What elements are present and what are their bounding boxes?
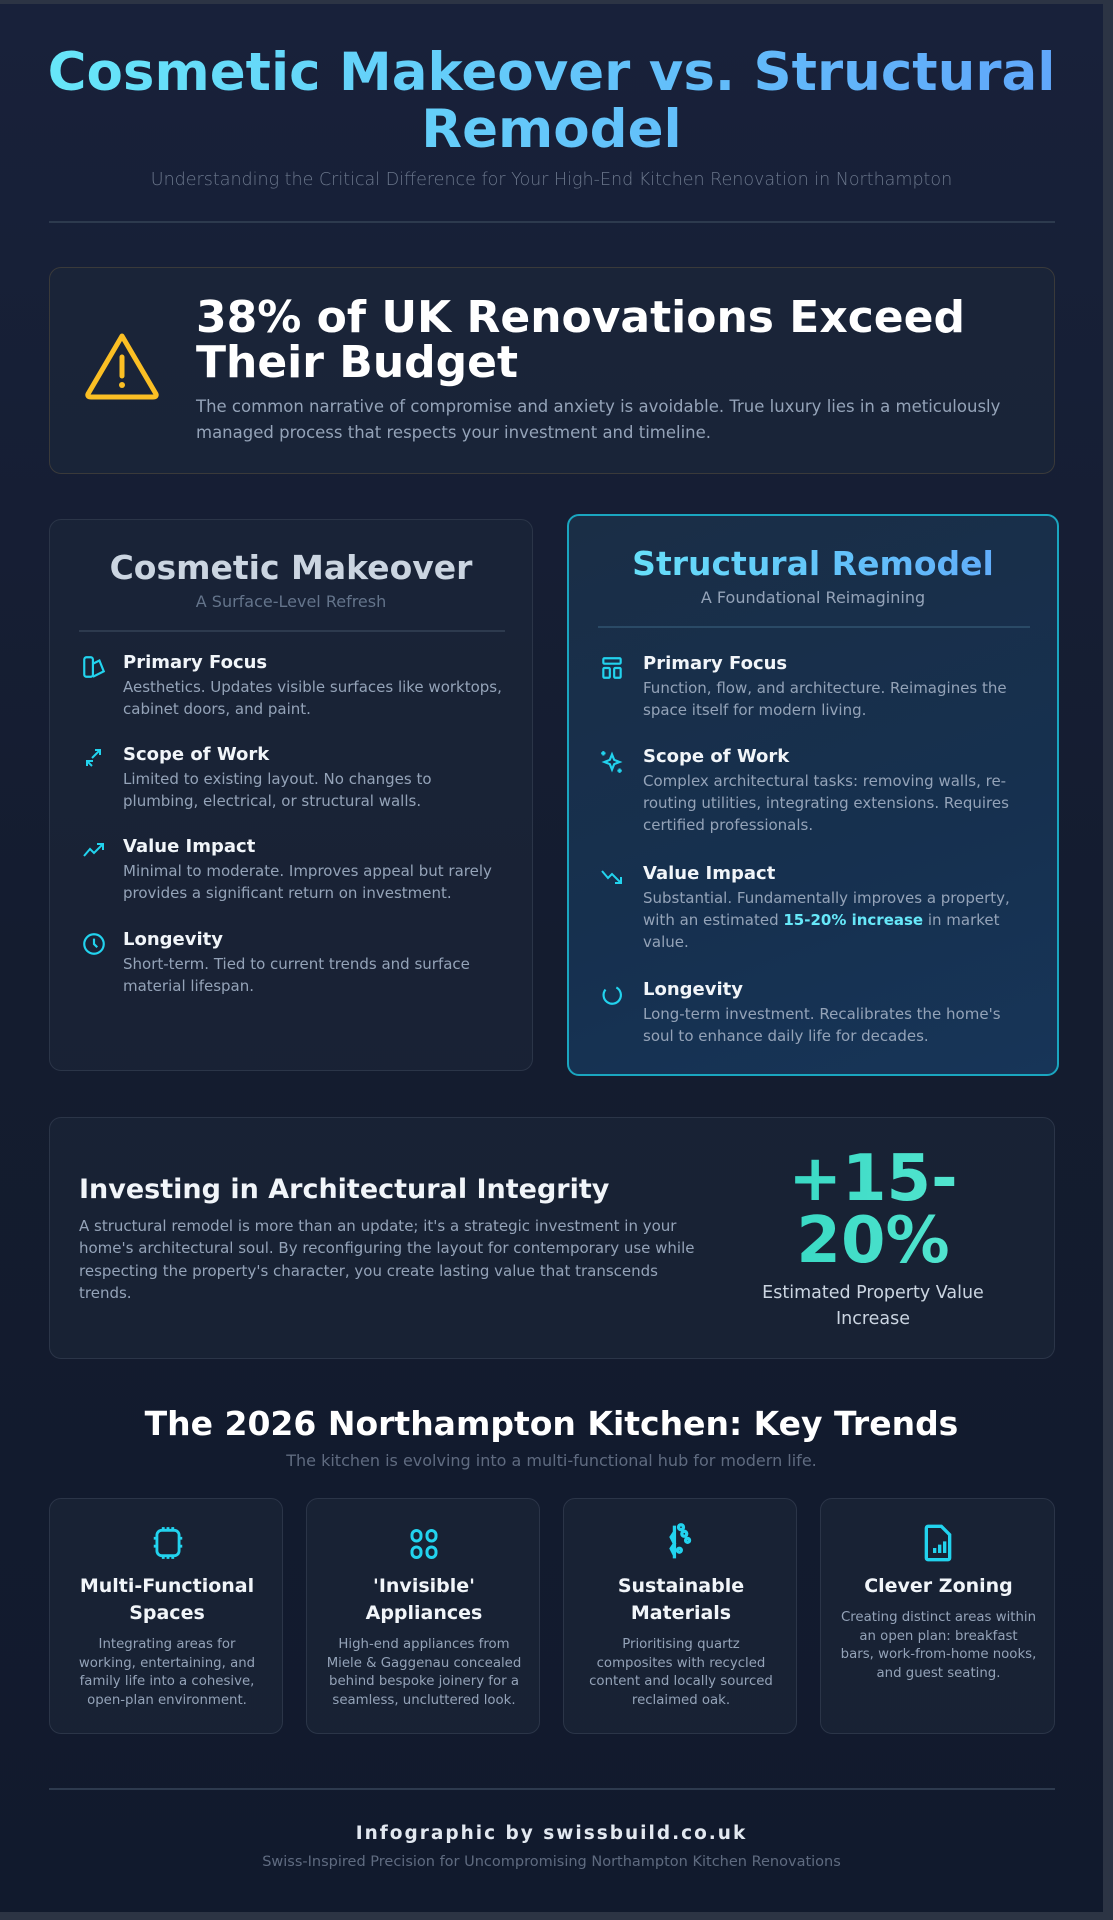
panel: cosmetic makeover: Longevity — [123, 929, 223, 950]
trend card: invisible appliances — [306, 1498, 540, 1734]
panel: structural remodel: Long-term investment. Recalibrates the home's soul to enhance daily life for decades. — [643, 1005, 1001, 1045]
trend card: clever zoning: Creating distinct areas within — [841, 1610, 1036, 1625]
alert heading — [196, 292, 965, 388]
body: trends. — [79, 1284, 132, 1302]
trend card: multi-functional: Spaces — [129, 1602, 205, 1624]
panel: structural remodel: Primary Focus — [643, 653, 787, 674]
heading: Cosmetic Makeover — [110, 548, 472, 587]
trends subtitle: The kitchen is evolving into a multi-functional hub for modern life. — [286, 1451, 817, 1470]
stat: +15-20%: Estimated Property Value — [762, 1283, 984, 1303]
trend card: sustainable: Materials — [631, 1602, 731, 1624]
trend card: sustainable: content and locally sourced — [589, 1674, 773, 1689]
stat: +15-20%: +15- — [788, 1142, 958, 1216]
stat: +15-20% — [762, 1142, 984, 1329]
trends heading: The 2026 Northampton Kitchen: Key Trends — [145, 1404, 958, 1443]
trend card: multi-functional: Integrating areas for — [99, 1637, 235, 1652]
item: value — [601, 863, 1010, 951]
title: Cosmetic Makeover vs. Structural Remodel — [48, 42, 1055, 160]
icon: warning — [85, 334, 159, 400]
panel: structural remodel — [567, 514, 1059, 1076]
trend card: invisible appliances: behind bespoke joinery for a — [329, 1674, 519, 1689]
item: scope — [601, 746, 1009, 834]
trend card: clever zoning: and guest seating. — [877, 1666, 1000, 1680]
body: home's architectural soul. By reconfiguring the layout for contemporary use while — [79, 1239, 694, 1257]
alert text: The common narrative of compromise and anxiety is avoidable. True luxury lies in a meticulously managed process that respects your investment and timeline. — [196, 397, 1000, 442]
trend card: sustainable: composites with recycled — [597, 1656, 765, 1670]
item: value — [83, 836, 492, 902]
trend card: multi-functional: Multi-Functional — [80, 1575, 254, 1597]
footer tagline: Swiss-Inspired Precision for Uncompromising Northampton Kitchen Renovations — [262, 1854, 841, 1870]
item: longevity — [83, 929, 470, 995]
panel: structural remodel: Complex architectural tasks: removing walls, re-routing utilities, integrating extensions. Requires certified professionals. — [643, 772, 1009, 834]
subtitle: Understanding the Critical Difference for Your High-End Kitchen Renovation in Northampton — [151, 170, 952, 190]
panel: budget alert — [49, 267, 1055, 474]
panel: cosmetic makeover: Limited to existing layout. No changes to plumbing, electrical, or structural walls. — [123, 770, 432, 810]
trend card: invisible appliances: seamless, uncluttered look. — [332, 1692, 516, 1708]
trend card: multi-functional — [49, 1498, 283, 1734]
item: longevity — [602, 979, 1001, 1045]
trend card: invisible appliances: Appliances — [366, 1602, 482, 1624]
item: scope — [86, 744, 432, 810]
trend card: clever zoning: an open plan: breakfast — [859, 1628, 1018, 1644]
alert heading: 38% of UK Renovations Exceed — [196, 292, 965, 343]
item: primary focus — [602, 653, 1007, 719]
panel: structural remodel: Longevity — [643, 979, 743, 1000]
trend card: sustainable: Prioritising quartz — [622, 1637, 740, 1652]
stat: +15-20%: Increase — [836, 1309, 910, 1329]
trend card: clever zoning: Clever Zoning — [864, 1575, 1013, 1597]
trend card: multi-functional: family life into a cohesive, — [80, 1674, 254, 1689]
item: primary focus — [83, 652, 502, 718]
trend card: multi-functional: working, entertaining, and — [79, 1656, 255, 1670]
panel: structural remodel: Substantial. Fundamentally improves a property, with an estimated 15-20% increase in market value. — [643, 889, 1010, 951]
panel: cosmetic makeover — [49, 519, 533, 1071]
trend card: sustainable: reclaimed oak. — [632, 1692, 730, 1708]
stat: +15-20%: 20% — [796, 1204, 950, 1278]
panel: cosmetic makeover: A Surface-Level Refresh — [196, 592, 386, 611]
trend card: invisible appliances: High-end appliances from — [338, 1637, 510, 1652]
trend card: sustainable — [563, 1498, 797, 1734]
body: A structural remodel is more than an update; it's a strategic investment in your — [79, 1217, 676, 1235]
panel: cosmetic makeover: Primary Focus — [123, 652, 267, 673]
panel: cosmetic makeover: Aesthetics. Updates visible surfaces like worktops, cabinet doors, and paint. — [123, 678, 502, 718]
trend card: invisible appliances: Miele & Gaggenau concealed — [327, 1656, 521, 1670]
panel: structural remodel: A Foundational Reimagining — [701, 588, 925, 607]
panel: structural remodel: Function, flow, and architecture. Reimagines the space itself for modern living. — [643, 679, 1007, 719]
panel: cosmetic makeover: Minimal to moderate. Improves appeal but rarely provides a significant return on investment. — [123, 862, 492, 902]
panel: cosmetic makeover: Short-term. Tied to current trends and surface material lifespan. — [123, 955, 470, 995]
trend card: clever zoning — [820, 1498, 1055, 1734]
body — [79, 1217, 694, 1302]
alert heading: Their Budget — [196, 337, 518, 388]
heading: Structural Remodel — [632, 544, 994, 583]
footer credit: Infographic by swissbuild.co.uk — [356, 1823, 747, 1844]
trend card: invisible appliances: 'Invisible' — [373, 1575, 475, 1597]
panel: structural remodel: Scope of Work — [643, 746, 789, 767]
panel: investing — [49, 1117, 1055, 1359]
heading: Investing in Architectural Integrity — [79, 1174, 609, 1205]
body: respecting the property's character, you create lasting value that transcends — [79, 1262, 658, 1280]
trend card: sustainable: Sustainable — [618, 1575, 744, 1597]
panel: cosmetic makeover: Value Impact — [123, 836, 255, 857]
trend card: multi-functional: open-plan environment. — [87, 1692, 247, 1708]
trend card: clever zoning: bars, work-from-home nooks, — [841, 1647, 1036, 1662]
panel: structural remodel: Value Impact — [643, 863, 775, 884]
panel: cosmetic makeover: Scope of Work — [123, 744, 269, 765]
